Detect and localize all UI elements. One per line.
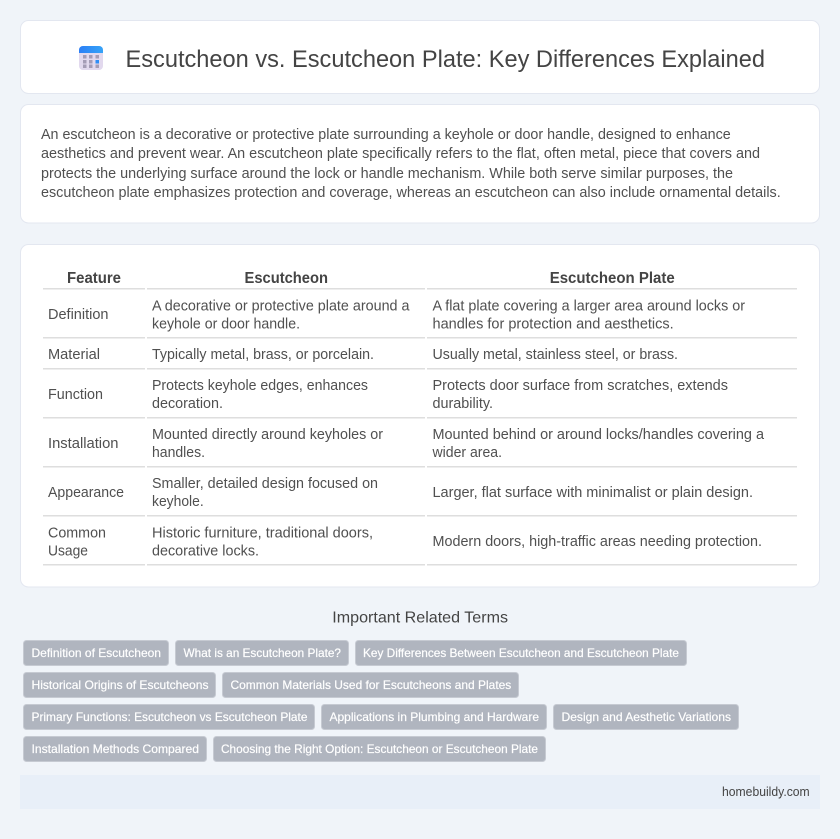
tag: Choosing the Right Option: Escutcheon or Escutcheon Plate [221,742,538,756]
table row: material [48,347,678,363]
table row: function: Protects keyhole edges, enhances [152,378,368,394]
table row: function: Protects door surface from scratches, extends [432,378,728,394]
tag: Common Materials Used for Escutcheons and Plates [230,678,511,692]
table row: definition: keyhole or door handle. [152,316,300,332]
table row: definition: Definition [48,307,108,323]
tag [322,704,546,730]
table header row: Escutcheon [244,270,328,287]
table row: installation [48,427,764,461]
tag [24,736,206,762]
table row: material: Typically metal, brass, or porcelain. [152,347,374,363]
text block: introduction paragraph: protects the underlying surface around the lock or handle mechanism. While both serve similar purposes, the [41,166,733,182]
table row: common usage [48,526,762,560]
table row: material: Usually metal, stainless steel, or brass. [432,347,678,363]
table header row: Feature [67,270,121,287]
table row: common usage: Historic furniture, traditional doors, [152,526,373,542]
heading: important related terms: Important Related Terms [332,610,508,627]
tag [214,736,546,762]
tag: Design and Aesthetic Variations [562,710,731,724]
table row: definition: handles for protection and aesthetics. [432,316,674,332]
table row: common usage: Modern doors, high-traffic areas needing protection. [432,534,762,550]
text block: introduction paragraph: aesthetics and prevent wear. An escutcheon plate specifically refers to the flat, often metal, piece that covers and [41,146,760,162]
table row: common usage: decorative locks. [152,544,259,560]
panel: title header [20,20,820,94]
tag [24,704,314,730]
tag [24,672,216,698]
table row: appearance: keyhole. [152,494,204,510]
text block: introduction paragraph: escutcheon plate emphasizes protection and coverage, whereas an escutcheon can also include ornamental details. [41,185,781,201]
tag: Definition of Escutcheon [32,646,161,660]
table row: appearance: Larger, flat surface with minimalist or plain design. [432,485,753,501]
table row: appearance: Appearance [48,485,124,501]
table row: definition: A flat plate covering a larger area around locks or [432,298,745,314]
text block: introduction paragraph [41,127,781,201]
tag [222,672,518,698]
panel: introduction [20,104,820,223]
footer site name: homebuildy.com [722,785,810,799]
footer [20,775,820,809]
title: Escutcheon vs. Escutcheon Plate: Key Differences Explained [126,46,765,73]
table row: appearance: Smaller, detailed design focused on [152,476,378,492]
table row: material: Material [48,347,100,363]
tag list [24,640,738,762]
tag: Historical Origins of Escutcheons [32,678,208,692]
table row: installation: wider area. [432,445,502,461]
table row: common usage: Usage [48,544,88,560]
tag [176,640,348,666]
table row: installation: Mounted behind or around locks/handles covering a [432,427,764,443]
tag: What is an Escutcheon Plate? [184,646,341,660]
table row: function: decoration. [152,396,223,412]
tag [24,640,168,666]
tag: Applications in Plumbing and Hardware [330,710,539,724]
table row: installation: Mounted directly around keyholes or [152,427,383,443]
table row: installation: Installation [48,436,118,452]
tag: Primary Functions: Escutcheon vs Escutcheon Plate [32,710,308,724]
table row: function [48,378,728,412]
table row: function: Function [48,387,103,403]
table row: appearance [48,476,753,510]
panel: comparison table [20,244,820,587]
table row: function: durability. [432,396,493,412]
table header row [67,270,675,287]
tag: Key Differences Between Escutcheon and Escutcheon Plate [363,646,679,660]
table row: installation: handles. [152,445,205,461]
tag: Installation Methods Compared [32,742,199,756]
table row: common usage: Common [48,526,106,542]
icon: calendar [79,46,103,70]
table row: definition [48,298,745,332]
tag [356,640,686,666]
table row: definition: A decorative or protective plate around a [152,298,410,314]
tag [554,704,738,730]
text block: introduction paragraph: An escutcheon is a decorative or protective plate surrounding a keyhole or door handle, designed to enhance [41,127,731,143]
table header row: Escutcheon Plate [550,270,675,287]
